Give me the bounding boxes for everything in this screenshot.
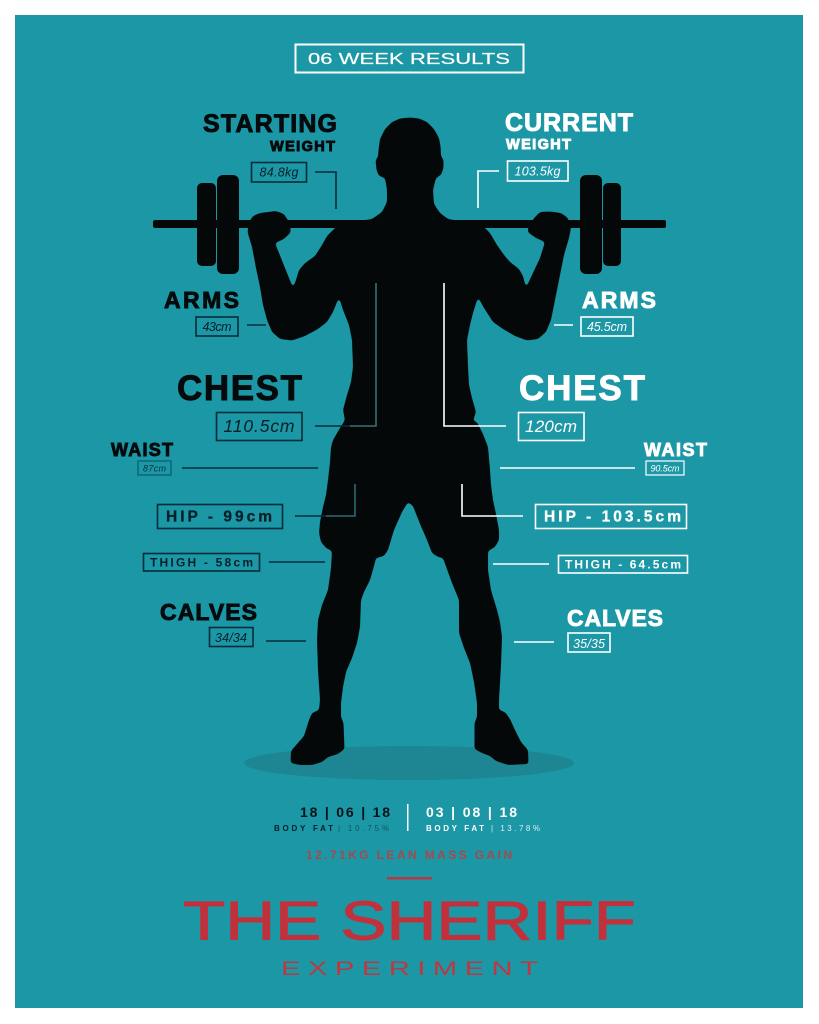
current weight label: CURRENT [505,109,633,137]
waist left [111,440,318,475]
arms right [554,287,656,336]
calves left: CALVES [160,599,257,625]
chest right: 120cm [525,417,577,436]
chest left: 110.5cm [224,416,294,436]
thigh right [493,556,688,573]
arms right: ARMS [582,287,656,313]
barbell [153,175,666,274]
end date stats: 03 | 08 | 18 [426,804,517,820]
current weight label: WEIGHT [506,137,571,153]
calves right [514,605,663,652]
waist right: 90.5cm [650,464,680,474]
end date stats: BODY FAT [426,824,484,833]
calves right: CALVES [567,605,663,631]
hip left: HIP - 99cm [166,508,272,526]
athlete silhouette [248,118,571,765]
starting weight label: WEIGHT [270,139,335,155]
ground shadow [244,746,574,780]
start date stats: BODY FAT [274,824,333,833]
waist right: WAIST [644,440,707,460]
start date stats: 18 | 06 | 18 [300,804,390,820]
current weight label: 103.5kg [514,164,561,178]
starting weight label: STARTING [203,110,337,138]
arms left: 43cm [202,320,232,334]
hip right: HIP - 103.5cm [544,508,681,526]
hip right [462,484,686,528]
starting weight label: 84.8kg [260,166,299,180]
chest left: CHEST [177,369,302,408]
calves right: 35/35 [573,637,605,651]
calves left [160,599,306,646]
red divider [387,877,432,880]
waist right [500,440,707,475]
thigh left: THIGH - 58cm [150,556,253,570]
chest right: CHEST [519,369,645,408]
hip left [158,484,355,528]
current weight label [478,109,633,208]
end date stats [426,804,540,833]
title: THE SHERIFF [183,890,636,952]
subtitle: EXPERIMENT [281,959,538,980]
start date stats [274,804,390,833]
date divider [407,804,408,831]
start date stats: | 10.75% [338,824,389,833]
calves left: 34/34 [215,631,247,645]
heading box: 06 week results [296,44,524,72]
chest right [444,283,645,440]
lean mass gain: 12.71KG LEAN MASS GAIN [306,848,512,862]
thigh right: THIGH - 64.5cm [565,558,681,572]
heading box: 06 week results: 06 WEEK RESULTS [308,51,510,68]
chest left [177,283,376,440]
arms left [164,287,266,336]
arms left: ARMS [164,287,239,313]
thigh left [144,554,325,571]
arms right: 45.5cm [587,320,627,334]
end date stats: | 13.78% [491,824,540,833]
waist left: WAIST [111,440,173,460]
starting weight label [203,110,337,209]
waist left: 87cm [143,464,166,474]
